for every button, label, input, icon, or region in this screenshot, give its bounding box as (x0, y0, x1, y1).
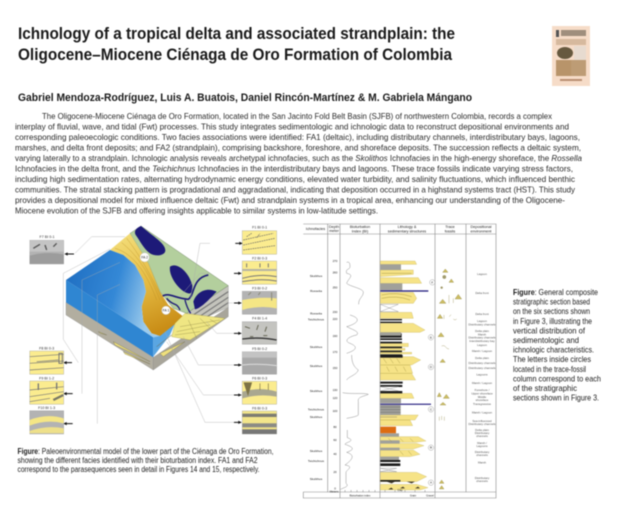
right figure caption: on the six sections shown (513, 306, 590, 316)
right figure caption: in Figure 3, illustrating the (513, 316, 592, 326)
panel: F2: F2 BI 0-3 (252, 256, 267, 260)
depositional environment labels: Marsh (478, 460, 486, 464)
depth labels: 80 (333, 425, 337, 429)
depositional environment labels: Delta plain (475, 356, 489, 360)
facies panels and leader lines (30, 226, 277, 434)
right figure caption: located in the trace-fossil (513, 364, 586, 374)
right figure caption: ichnologic characteristics. (513, 345, 594, 355)
depositional environment labels: shoreface (476, 398, 489, 402)
depositional environment labels: channels (476, 479, 488, 483)
depositional environment labels: Interdistributary bay (469, 339, 495, 343)
hatched yellow delta front (172, 313, 225, 340)
depositional environment labels: Delta front (475, 312, 489, 316)
green land surface (130, 226, 228, 313)
right figure caption: stratigraphic section based (513, 297, 590, 307)
depth labels (330, 259, 339, 494)
depositional environment labels: Lagoons (476, 372, 488, 376)
depositional environment labels: Delta plain (475, 329, 489, 333)
depth labels: 190 (333, 334, 338, 338)
panel: F4: F4 BI 1-4 (252, 317, 267, 321)
ichnofacies labels: Teichichnus (308, 408, 325, 412)
ichnofacies labels: Skolithos (310, 449, 323, 453)
FA2 label: FA 2 (141, 256, 148, 260)
depositional environment labels: Marsh / Lagoon (472, 381, 492, 385)
abstract text block: The Oligocene-Miocene Ciénaga de Oro Formation, located in the San Jacinto Fold Belt Basin (SJFB) of northwestern Colombia, records a complex (42, 111, 553, 121)
section letter circles: A (430, 481, 432, 485)
right figure caption: sedimentologic and (513, 335, 579, 345)
depth labels: 40 (333, 452, 337, 456)
depth labels: 20 (333, 470, 337, 474)
right figure caption (513, 287, 601, 403)
ichnofacies labels (308, 274, 325, 481)
column headings: Bioturbation (350, 225, 370, 229)
panel: F2 (242, 256, 277, 284)
depositional environment labels: Marsh (478, 332, 486, 336)
lithology column upper (380, 261, 428, 356)
depositional environment labels: Distributary channels (468, 361, 496, 365)
depositional environment labels: Lagoon (477, 343, 487, 347)
leader lines (63, 237, 243, 425)
right figure caption: The letters inside circles (513, 354, 591, 364)
depth labels: 170 (333, 350, 338, 354)
abstract text block (15, 111, 582, 216)
panel: F3: F3 BI 0-2 (252, 286, 267, 290)
abstract text block: varying laterally to a strandplain. Ichnologic analysis reveals archetypal ichnofacies, such as the Skolithos Ichnofacies in the high-energy shoreface, the Rossella (15, 153, 582, 163)
section letter circles: B (430, 446, 432, 450)
ichnofacies labels: Teichichnus (308, 459, 325, 463)
footer axes: Bioturbation index (350, 494, 371, 498)
grey substrate faces (66, 286, 228, 370)
depositional environment labels: Transgressive (473, 402, 491, 406)
column headings: Ichnofacies (306, 227, 325, 231)
depositional environment labels: Delta front (475, 291, 489, 295)
table frame and headers (303, 224, 496, 498)
depth labels: 220 (333, 317, 338, 321)
depositional environment labels: Marsh / (477, 441, 487, 445)
depositional environment labels: Upper shoreface (471, 392, 493, 396)
depositional environment labels: Sea-influenced (472, 419, 492, 423)
panel: F7 (30, 235, 64, 264)
section letter circles: C (430, 407, 433, 411)
block diagram: paleoenvironmental model (66, 226, 228, 370)
panel: F10: F10 BI 1-3 (38, 406, 55, 410)
panel: F6 lower (242, 406, 277, 434)
footer axes: Clay (397, 488, 403, 492)
column headings: fossils (445, 230, 455, 234)
depositional environment labels: Distributary channels (468, 366, 496, 370)
depositional environment labels: channels (476, 434, 488, 438)
panel: F4 (242, 317, 277, 344)
column headings: Trace (445, 225, 455, 229)
right figure caption: column correspond to each (513, 373, 601, 383)
footer axes (345, 488, 434, 498)
depth labels: 120 (333, 396, 338, 400)
ichnofacies labels: Skolithos (310, 364, 323, 368)
ichnofacies labels: Skolithos (310, 477, 323, 481)
depositional environment labels: Lagoons (476, 444, 488, 448)
panel: F6 upper (242, 377, 277, 404)
ichnofacies labels: Skolithos (310, 274, 323, 278)
abstract text block: corresponding paleoecologic conditions. Two facies associations were identified: FA1 (deltaic), including distributary channels, interdistributary bays, lagoons, (15, 132, 580, 142)
authors: Gabriel Mendoza-Rodríguez, Luis A. Buatois, Daniel Rincón-Martínez & M. Gabriela Mángano (18, 92, 472, 104)
panel: F5: F5 BI 0-2 (252, 347, 267, 351)
column headings: meter (329, 229, 340, 233)
depth labels: 150 (333, 366, 338, 370)
abstract text block: Miocene evolution of the SJFB and offering insights applicable to similar systems in low-latitude settings. (15, 206, 378, 216)
column headings: environment (471, 230, 492, 234)
lithology column lower (380, 355, 449, 490)
depth labels: Meters (330, 490, 339, 494)
column headings: sedimentary structures (388, 230, 426, 234)
depositional environment labels: Lagoon (477, 319, 487, 323)
ichnofacies labels: Skolithos (310, 415, 323, 419)
panel: F6 upper: F6 BI 0-3 (252, 377, 267, 381)
column headings: Depth (329, 225, 339, 229)
abstract text block: interplay of fluvial, wave, and tidal (Fwt) processes. This study integrates sedimentologic and ichnologic data to reconstruct depositional environments and (15, 122, 569, 132)
title (18, 24, 455, 64)
depth labels: 230 (333, 310, 338, 314)
depositional environment labels: Distributary channels (468, 322, 496, 326)
depositional environment labels: Lagoon (477, 272, 487, 276)
sand: strandplain and delta (110, 233, 183, 336)
sea front face (66, 280, 153, 357)
ichnofacies labels: Rosselia (310, 312, 322, 316)
journal cover thumbnail (552, 26, 590, 86)
left figure caption (18, 447, 274, 474)
right figure caption: Figure: General composite (513, 287, 598, 297)
depositional environment labels (468, 272, 496, 483)
depositional environment labels: channels (476, 453, 488, 457)
depositional environment labels: Distributary (475, 431, 490, 435)
footer axes: Gravel (426, 494, 434, 498)
depth labels: 270 (333, 259, 338, 263)
dark lagoons and channels (135, 226, 217, 313)
depth labels: 260 (333, 270, 338, 274)
bioturbation curves (346, 262, 363, 353)
stratigraphic column chart (303, 224, 496, 498)
subsurface sand lenses (98, 332, 185, 364)
ichnofacies labels: Rosselia (310, 289, 322, 293)
panel: F9 (30, 376, 64, 404)
panel: F3 (242, 286, 277, 314)
footer axes: Grain (410, 494, 417, 498)
column headings: Lithology & (398, 225, 417, 229)
depositional environment labels: Delta plain (475, 428, 489, 432)
depositional environment labels: Distributary channels (468, 422, 496, 426)
depositional environment labels: Middle (478, 395, 487, 399)
FA1 label: FA 1 (163, 309, 169, 313)
depositional environment labels: Distributary channels (468, 336, 496, 340)
panel: F5 (242, 347, 277, 374)
sea surface (66, 250, 160, 337)
depositional environment labels: Distributary (475, 476, 490, 480)
FA2 label (140, 253, 149, 262)
title: Ichnology of a tropical delta and associated strandplain: the (18, 24, 455, 43)
trace fossil icons upper and letter circles: E (430, 335, 432, 339)
depositional environment labels: Marsh / Lagoon (472, 410, 492, 414)
panel: F10 (30, 406, 64, 434)
panel: F8 (30, 346, 64, 374)
right figure caption: of the stratigraphic (513, 383, 577, 393)
depth labels: 60 (333, 438, 337, 442)
abstract text block: communities. The stratal stacking pattern is progradational and aggradational, indicating that deposition occurred in a highstand systems tract (HST). This study (15, 184, 576, 194)
right figure caption: sections shown in Figure 3. (513, 393, 599, 403)
column headings: Depositional (471, 225, 492, 229)
trace fossil icons lower (437, 359, 449, 489)
abstract text block: provides a depositional model for mixed influence deltaic (Fwt) and strandplain systems in a tropical area, enhancing our understanding of the Oligocene- (15, 195, 565, 205)
panel: F7: F7 BI 0-1 (39, 235, 55, 239)
depositional environment labels: Foreshore / (475, 388, 490, 392)
depth labels: 0 (334, 486, 336, 490)
ichnofacies labels: Teichichnus (308, 318, 325, 322)
ichnofacies labels: Skolithos (310, 345, 323, 349)
panel: F8: F8 BI 0-3 (39, 346, 54, 350)
abstract text block: marshes, and delta front deposits; and FA2 (strandplain), comprising backshore, foreshore, and shoreface deposits. The succession reflects a deltaic system, (15, 142, 581, 152)
panel: F9: F9 BI 1-2 (39, 376, 54, 380)
trace fossil icons upper and letter circles (428, 269, 462, 349)
depth labels: 130 (333, 388, 338, 392)
column headings: Index (BI) (352, 230, 369, 234)
panel: F6 lower: F6 BI 0-3 (252, 406, 267, 410)
abstract text block: including high sedimentation rates, alternating hydrodynamic energy conditions, elevated water turbidity, and salinity fluctuations, which influenced benthic (15, 174, 575, 184)
delta front face (153, 323, 175, 357)
section letter circles (428, 364, 434, 485)
abstract text block: Ichnofacies in the delta front, and the Teichichnus Ichnofacies in the interdistributary bays and lagoons. These trace fossils indicate varying stress factors, (15, 164, 573, 174)
right figure caption: vertical distribution of (513, 325, 586, 335)
panel: F1 (242, 226, 277, 254)
left figure caption: Figure: Paleoenvironmental model of the lower part of the Ciénaga de Oro Formation, (18, 447, 274, 456)
depth labels: 100 (333, 409, 338, 413)
left figure caption: showing the different facies identified with their bioturbation index. FA1 and FA2 (18, 456, 258, 465)
depth labels: 250 (333, 286, 338, 290)
trace fossil icons upper and letter circles: F (431, 280, 433, 284)
depositional environment labels: Distributary (475, 450, 490, 454)
panel: F1: F1 BI 0-1 (252, 226, 267, 230)
section letter circles: D (430, 365, 433, 369)
column headings (306, 225, 492, 234)
depositional environment labels: Marsh / Lagoon (472, 349, 492, 353)
ichnofacies labels: Skolithos (310, 389, 323, 393)
FA1 label (162, 306, 170, 315)
title: Oligocene–Miocene Ciénaga de Oro Formation of Colombia (18, 45, 452, 64)
left figure caption: correspond to the parasequences seen in detail in Figures 14 and 15, respectively. (18, 465, 260, 474)
